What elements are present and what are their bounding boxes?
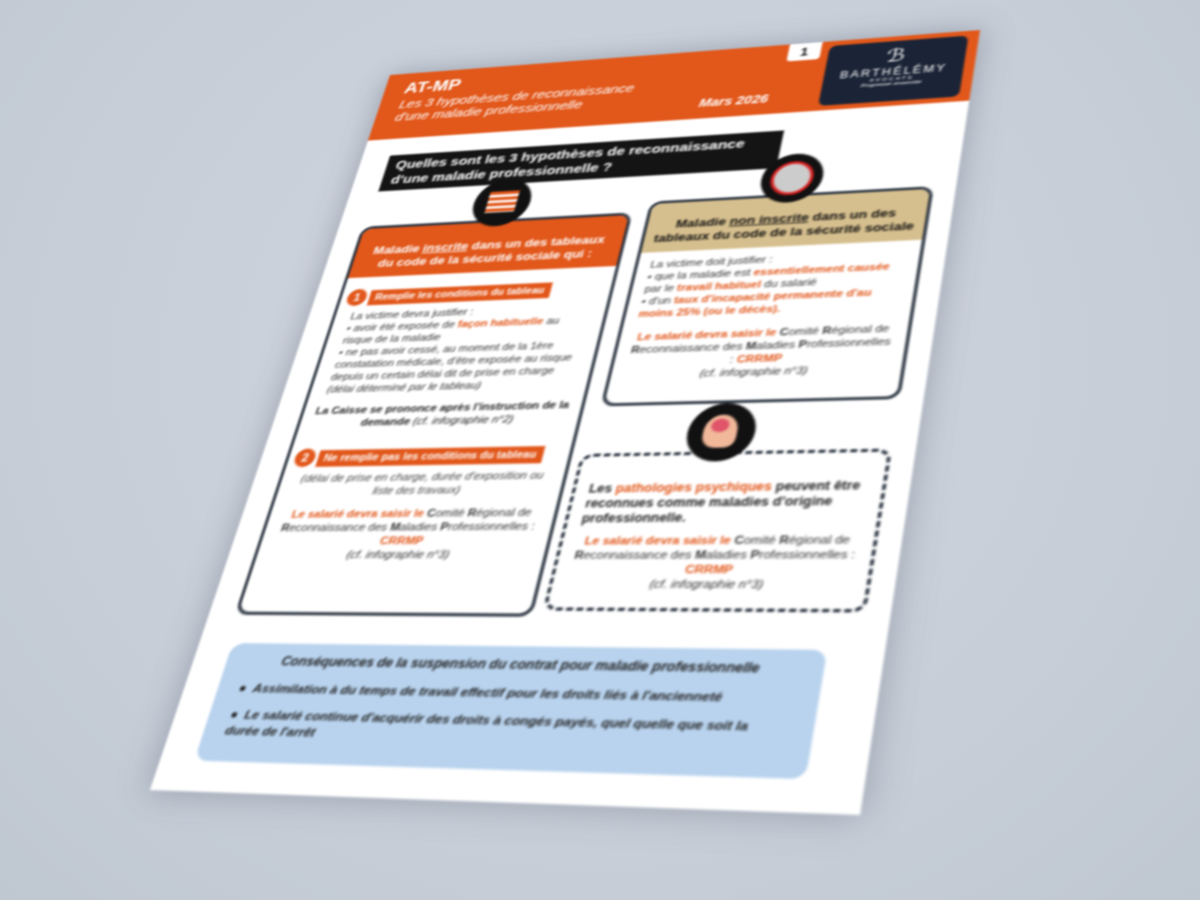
panel: non-listed disease [600,186,934,406]
panel heading [641,189,930,253]
condition 1 text: • ne pas avoir cessé, au moment de la 1ère constatation médicale, d'être exposée au risque depuis un certain délai dit de prise en charge (délai déterminé par le tableau) [325,340,573,395]
condition 1: 1 [352,291,362,304]
icon: head [681,402,761,462]
subtitle: Les 3 hypothèses de reconnaissance [397,82,636,111]
panel: non-listed disease: Le salarié devra saisir le Comité Régional de Reconnaissance des Maladies Professionnelles : CRRMP [630,323,892,366]
document page [150,30,980,815]
header band [368,30,980,141]
panel: table disease: (délai de prise en charge, durée d'exposition ou liste des travaux) [299,470,545,497]
condition 1 text: La victime devra justifier : [349,307,475,322]
condition 1: Remplie les conditions du tableau [373,285,546,303]
panel heading: du code de la sécurité sociale qui : [376,247,594,269]
panel: non-listed disease: • d'un taux d'incapacité permanente d'au moins 25% (ou le décès). [637,287,872,320]
panel heading: Maladie non inscrite dans un des [675,206,897,230]
panel: table disease: Le salarié devra saisir le Comité Régional de Reconnaissance des Maladies Professionnelles : CRRMP [279,507,536,547]
subtitle: d'une maladie professionnelle [393,98,584,124]
logo: BARTHÉLÉMY [839,62,948,81]
icon: table [467,177,537,228]
panel: psychological pathologies [543,449,892,612]
condition 2 [292,444,547,469]
consequences box [194,643,827,779]
logo: Progresser ensemble [860,80,922,89]
logo: ℬ [885,45,907,66]
question banner [378,130,784,191]
panel: table disease: (cf. infographie n°3) [345,549,451,561]
panel: non-listed disease: (cf. infographie n°3) [698,365,808,380]
subtitle [393,82,636,124]
panel: table disease [235,212,633,617]
panel heading: tableaux du code de la sécurité sociale [652,219,915,245]
logo [818,36,969,106]
condition 2: 2 [300,451,311,464]
panel: psychological pathologies: Les pathologies psychiques peuvent être reconnues comme maladies d'origine professionnelle. [580,478,861,525]
condition 1 text: • avoir été exposée de façon habituelle au risque de la maladie [341,316,561,346]
condition 2: Ne remplie pas les conditions du tableau [322,449,538,464]
panel: psychological pathologies: Le salarié devra saisir le Comité Régional de Reconnaissance des Maladies Professionnelles : CRRMP [573,534,856,576]
page number tab [786,42,823,61]
panel: table disease: La Caisse se prononce après l'instruction de la demande (cf. infographie n°2) [314,400,571,428]
question banner: Quelles sont les 3 hypothèses de reconnaissance [394,137,746,172]
consequences box: Conséquences de la suspension du contrat pour maladie professionnelle [279,654,761,676]
title: AT-MP [402,77,463,97]
question banner: d'une maladie professionnelle ? [389,160,614,187]
page number tab: 1 [799,45,810,58]
panel: non-listed disease: La victime doit justifier : [649,254,774,270]
condition 1 text [325,307,574,396]
panel heading [348,215,629,278]
panel heading: Maladie inscrite dans un des tableaux [372,233,606,257]
date: Mars 2026 [698,92,770,109]
consequences box: ● Le salarié continue d'acquérir des droits à congés payés, quel quelle que soit la durée de l'arrêt [223,709,749,740]
panel: psychological pathologies: (cf. infographie n°3) [648,578,764,591]
condition 1 [345,280,554,308]
panel: non-listed disease: • que la maladie est essentiellement causée par le travail habituel du salarié [643,262,891,295]
consequences box: ● Assimilation à du temps de travail effectif pour les droits liés à l'ancienneté [237,682,724,705]
logo: AVOCATS [869,76,914,83]
icon: crossed table [756,152,828,204]
